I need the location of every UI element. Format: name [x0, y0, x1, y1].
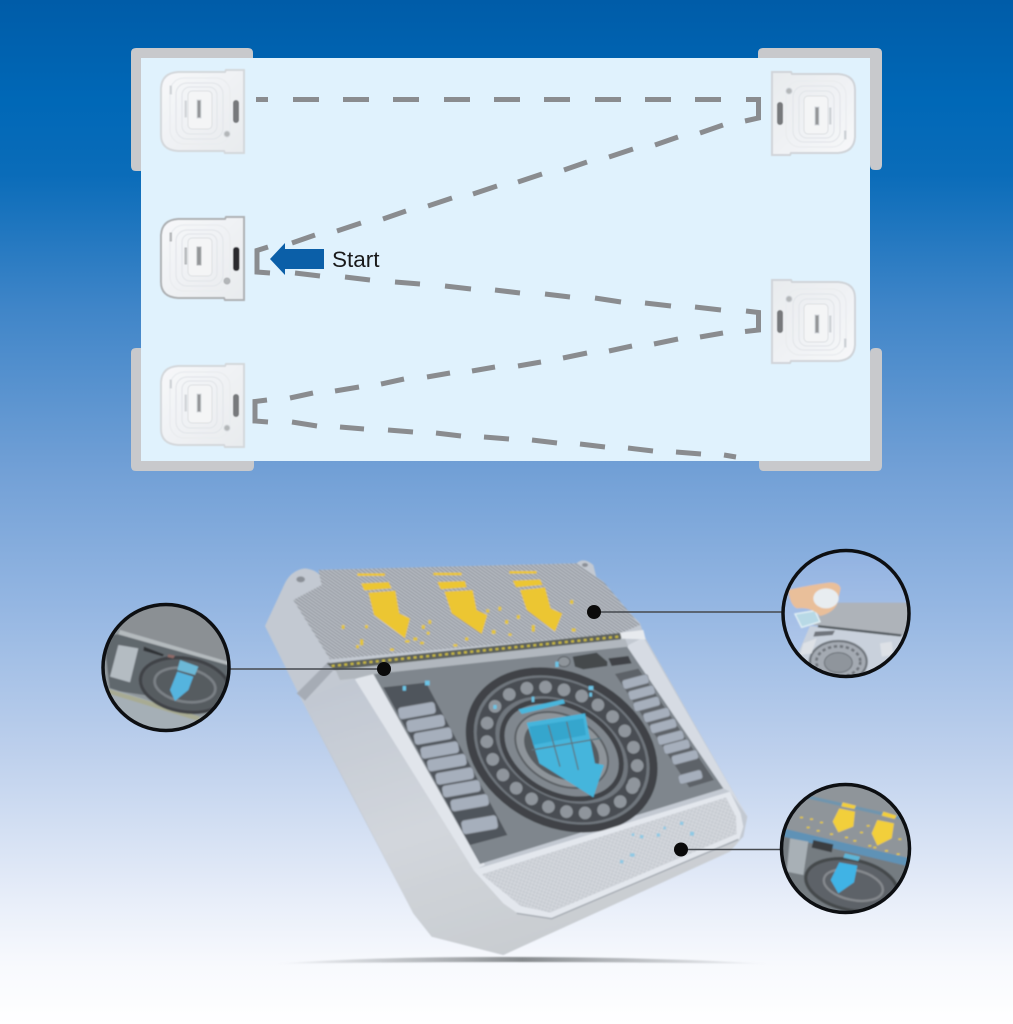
frame corner: bottom right [759, 348, 882, 471]
robot: middle right [772, 280, 855, 363]
rotating pad ring assembly [442, 640, 681, 860]
device front face [303, 678, 740, 955]
robot: top right [772, 72, 855, 155]
frame corner: bottom left [131, 348, 254, 471]
yellow dust particles [342, 600, 591, 651]
panel: room floor plan with cleaning path [131, 48, 882, 471]
dust strip [327, 630, 646, 670]
shadow under pad [297, 662, 337, 701]
top mesh pad [293, 563, 640, 659]
right slats [622, 674, 703, 785]
callout dot: dust strip [377, 662, 391, 676]
yellow arrow 2 [433, 573, 487, 634]
front lip [333, 638, 628, 680]
right slat groove [615, 669, 714, 787]
label: start: Start [332, 247, 380, 272]
device back body [265, 560, 747, 955]
frame corner: top right [758, 48, 882, 170]
panel: cleaning robot cutaway [265, 560, 747, 955]
yellow arrow 1 [357, 573, 410, 638]
callout dot: mesh pad [587, 605, 601, 619]
blue water arrow [518, 699, 604, 797]
callout circle: left detail with blue arrow [101, 602, 231, 732]
small button [558, 657, 570, 667]
room floor [141, 58, 870, 461]
inner tray [373, 646, 723, 864]
robot: bottom left [161, 364, 244, 447]
right rim [627, 637, 747, 817]
callout circle: dust and water arrows [780, 782, 912, 914]
front felt pad [473, 792, 743, 919]
knob holes [296, 563, 588, 582]
yellow arrow 3 [509, 571, 562, 632]
sensor window [573, 653, 607, 669]
dashed cleaning path [255, 100, 758, 457]
callout dot: front pad [674, 842, 688, 856]
leader line: front pad [681, 848, 781, 850]
left slat groove [383, 683, 507, 845]
left rim [355, 671, 485, 871]
floor shadow [275, 957, 770, 964]
callout circle: hand spraying the mesh pad [781, 548, 911, 678]
blue water droplets [403, 662, 593, 709]
arrow: start [270, 243, 324, 275]
pad water droplets [620, 822, 694, 863]
leader line: mesh pad [594, 611, 783, 613]
robot: top left [161, 70, 244, 153]
frame corner: top left [131, 48, 253, 171]
leader line: dust strip [229, 668, 384, 670]
upper right slot [608, 656, 632, 666]
robot: middle left start position [161, 217, 244, 300]
left slats [398, 701, 499, 835]
